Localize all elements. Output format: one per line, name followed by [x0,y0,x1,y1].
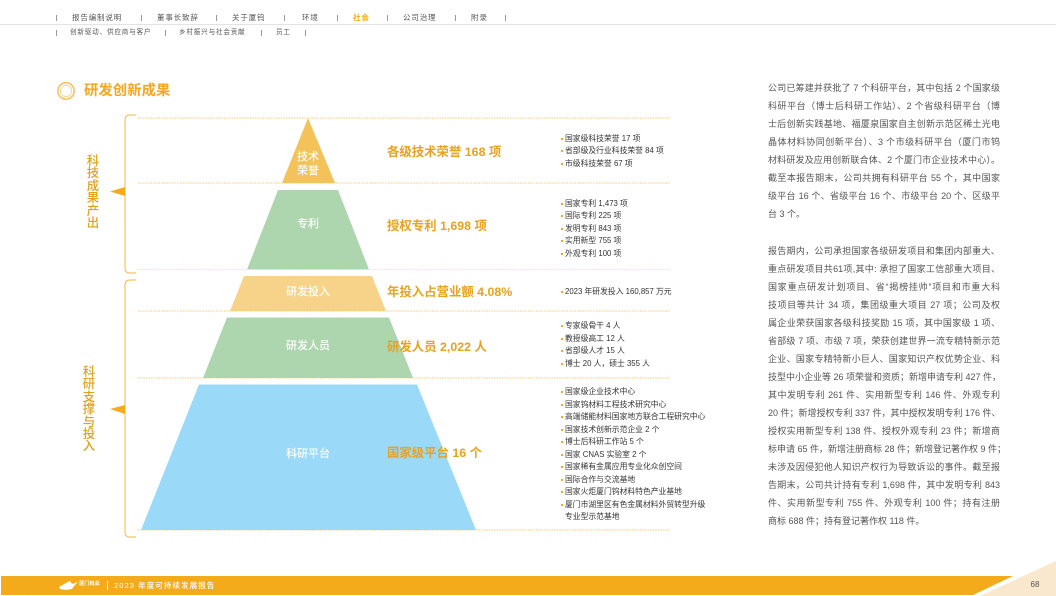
side label: outputs: 产 [87,204,99,218]
navigation: sub menu: 员工 [276,29,291,36]
list: platforms detail: 国家级企业技术中心 [565,387,635,396]
list: platforms detail: 国际合作与交流基地 [565,475,635,484]
text block: platforms paragraph: 晶体材料协同创新平台）、3 个市级科研平台（厦门市钨 [768,136,1000,146]
list: staff detail: 博士 20 人，硕士 355 人 [565,359,650,368]
side label: outputs: 成 [87,179,99,193]
navigation: main menu [0,13,1056,25]
navigation: main menu: 报告编制说明 [72,13,122,22]
text block: projects and IP paragraph: 省部级 7 项、市级 7 项，荣获创建世界一流专精特新示范 [768,336,1000,346]
text block: projects and IP paragraph: 20 件；新增授权专利 337 件，其中授权发明专利 176 件、 [768,408,1001,418]
list: platforms detail: 博士后科研工作站 5 个 [565,437,644,446]
list: honours detail: 市级科技荣誉 67 项 [565,159,633,168]
side label: outputs: 技 [87,166,99,180]
text block: projects and IP paragraph: 技项目等共计 34 项，集团级重大项目 27 项；公司及权 [768,300,1000,310]
icon: heading circle [57,82,75,100]
list: patents detail: 外观专利 100 项 [565,249,621,258]
metric: staff: 研发人员 2,022 人 [387,340,487,354]
side label: outputs: 出 [87,216,99,230]
text block: projects and IP paragraph [768,246,1006,526]
bracket: inputs [125,280,136,537]
text block: platforms paragraph: 士后创新实践基地、福厦泉国家自主创新示范区稀土光电 [768,118,1000,128]
text block: platforms paragraph: 科研平台（博士后科研工作站）、2 个省级科研平台（博 [768,100,1000,110]
list: staff detail [561,321,650,368]
text block: projects and IP paragraph: 报告期内，公司承担国家各级研发项目和集团内部重大、 [768,246,1000,256]
navigation: main menu: 公司治理 [403,13,436,22]
pyramid label: honours: 技术 [297,151,319,163]
arrow: outputs [110,187,125,196]
text block: platforms paragraph: 公司已筹建并获批了 7 个科研平台，其中包括 2 个国家级 [768,82,1000,92]
list: platforms detail [561,387,705,521]
logo mark [59,581,78,590]
list: platforms detail: 国家钨材料工程技术研究中心 [565,400,666,409]
text block: projects and IP paragraph: 标申请 65 件，新增注册商标 28 件；新增登记著作权 9 件； [768,444,1006,454]
metric: platforms: 国家级平台 16 个 [387,446,482,460]
list: patents detail [561,199,628,258]
navigation: main menu: 社会 [353,13,370,22]
side label: inputs: 投 [83,427,95,441]
side label: inputs: 撑 [83,402,95,416]
navigation: main menu: 环境 [302,13,319,22]
text block: platforms paragraph: 截至本报告期末，公司共拥有科研平台 55 个，其中国家 [768,172,1000,182]
list: staff detail: 专家级骨干 4 人 [565,321,620,330]
side label: inputs [83,365,95,453]
footer title: 2023 年度可持续发展报告 [114,581,215,590]
text block: projects and IP paragraph: 未涉及因侵犯他人知识产权行为导致诉讼的事件。截至报 [768,462,1000,472]
pyramid label: honours: 荣誉 [297,165,319,177]
list: platforms detail: 专业型示范基地 [565,512,620,521]
list: platforms detail: 国家火炬厦门钨材料特色产业基地 [565,487,682,496]
side label: outputs: 果 [87,191,99,205]
text block: projects and IP paragraph: 企业、国家专精特新小巨人、国家知识产权优势企业、科 [768,354,1000,364]
text block: projects and IP paragraph: 国家重点研发计划项目、省“揭榜挂帅”项目和市重大科 [768,282,1000,292]
navigation: sub menu [56,28,306,36]
list: investment detail: 2023 年研发投入 160,857 万元 [565,287,672,296]
navigation: sub menu: 创新驱动、供应商与客户 [70,29,151,36]
page number: 68 [1031,580,1039,589]
text block: projects and IP paragraph: 授权实用新型专利 138 件、授权外观专利 23 件；新增商 [768,426,1000,436]
text block: projects and IP paragraph: 重点研发项目共61项,其中: 承担了国家工信部重大项目、 [768,264,1000,274]
metric: patents: 授权专利 1,698 项 [387,218,487,232]
side label: inputs: 与 [83,415,95,429]
metric: honours: 各级技术荣誉 168 项 [387,144,501,158]
pyramid tier: honours [282,118,335,183]
text block: projects and IP paragraph: 技型中小企业等 26 项荣誉和资质；新增申请专利 427 件， [768,372,1001,382]
metric: investment: 年投入占营业额 4.08% [387,284,512,298]
pyramid tier: R&D investment [230,276,386,311]
text block: projects and IP paragraph: 件、实用新型专利 755 件、外观专利 100 件；持有注册 [768,498,1000,508]
side label: inputs: 支 [83,390,95,404]
list: patents detail: 国家专利 1,473 项 [565,199,628,208]
text block: platforms paragraph [768,82,1000,218]
side label: outputs [87,154,99,230]
list: honours detail [561,134,664,168]
list: patents detail: 发明专利 843 项 [565,224,621,233]
footer: cream corner [980,561,1056,596]
list: platforms detail: 国家稀有金属应用专业化众创空间 [565,462,682,471]
arrow: inputs [110,405,125,414]
side label: inputs: 入 [83,439,95,453]
footer separator [107,581,108,590]
text block: projects and IP paragraph: 其中发明专利 261 件、实用新型专利 146 件、外观专利 [768,390,1000,400]
side label: inputs: 研 [83,377,95,391]
list: staff detail: 省部级人才 15 人 [565,346,625,355]
list: patents detail: 实用新型 755 项 [565,236,621,245]
text block: platforms paragraph: 台 3 个。 [768,208,805,218]
navigation: sub menu: 乡村振兴与社会贡献 [179,29,246,36]
side label: outputs: 科 [87,154,99,168]
pyramid label: investment: 研发投入 [286,286,330,298]
text block: projects and IP paragraph: 告期末，公司共计持有专利 1,698 件，其中发明专利 843 [768,480,1000,490]
navigation: main menu: 附录 [471,13,488,22]
list: platforms detail: 厦门市湖里区有色金属材料外贸转型升级 [565,500,705,509]
list: honours detail: 省部级及行业科技荣誉 84 项 [565,146,664,155]
list: platforms detail: 国家 CNAS 实验室 2 个 [565,450,646,459]
navigation: main menu: 董事长致辞 [157,13,199,22]
list: staff detail: 教授级高工 12 人 [565,334,625,343]
side label: inputs: 科 [83,365,95,379]
dotted separator lines [138,118,670,530]
pyramid tier: research platforms [141,384,476,530]
text block: platforms paragraph: 级平台 16 个、省级平台 16 个、市级平台 20 个、区级平 [768,190,1000,200]
pyramid tier: patents [247,190,369,270]
pyramid label: patents: 专利 [297,218,319,230]
pyramid label: staff: 研发人员 [286,340,330,352]
pyramid label: platforms: 科研平台 [286,448,330,460]
list: platforms detail: 国家技术创新示范企业 2 个 [565,425,659,434]
navigation: main menu: 关于厦钨 [232,13,265,22]
heading: 研发创新成果 [84,83,170,99]
list: honours detail: 国家级科技荣誉 17 项 [565,134,640,143]
pyramid label: honours [297,150,319,177]
list: patents detail: 国际专利 225 项 [565,211,621,220]
text block: projects and IP paragraph: 属企业荣获国家各级科技奖励 15 项，其中国家级 1 项、 [768,318,1000,328]
pyramid tier: R&D staff [203,318,413,378]
list: platforms detail: 高端储能材料国家地方联合工程研究中心 [565,412,705,421]
bracket: outputs [125,115,136,273]
logo text: 厦门钨业 [79,581,100,587]
text block: platforms paragraph: 材料研发及应用创新联合体、2 个厦门市企业技术中心）。 [768,154,1000,164]
text block: projects and IP paragraph: 商标 688 件；持有登记著作权 118 件。 [768,516,924,526]
